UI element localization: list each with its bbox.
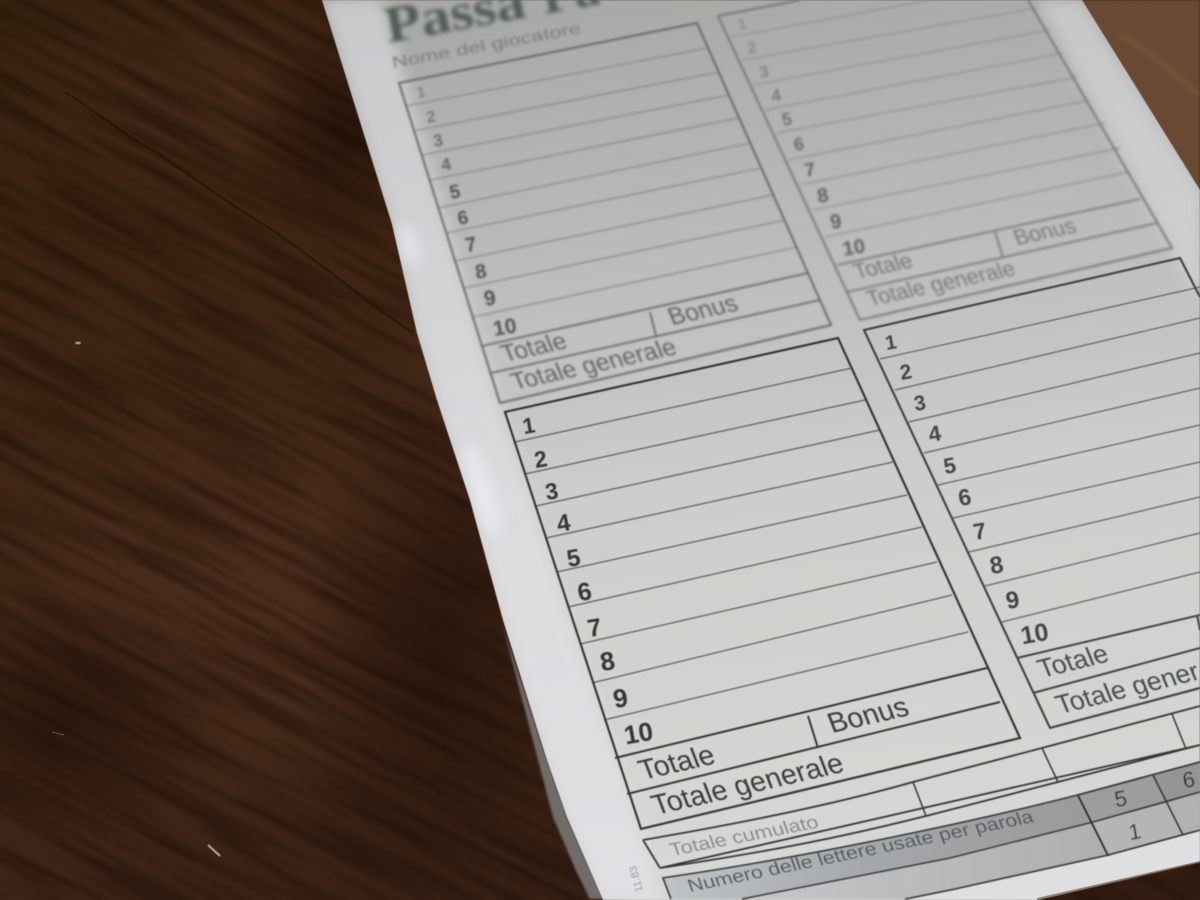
scorecard paper sheet <box>322 0 1200 900</box>
row numbers: 3 <box>912 391 928 416</box>
row numbers: 6 <box>956 483 973 511</box>
title <box>380 0 604 55</box>
gray letters-per-word bar <box>663 795 1108 899</box>
row numbers: 9 <box>611 682 630 714</box>
row numbers: 4 <box>770 85 783 106</box>
row numbers: 10 <box>491 314 518 341</box>
row numbers: 1 <box>520 412 537 439</box>
row numbers: 8 <box>816 184 830 208</box>
row numbers: 5 <box>780 108 794 130</box>
row numbers: 1 <box>884 331 898 355</box>
row numbers: 6 <box>575 577 594 607</box>
totals labels: Totale gener <box>1051 656 1200 720</box>
row numbers: 10 <box>1018 618 1051 650</box>
row numbers <box>737 15 867 261</box>
row numbers: 8 <box>474 260 488 284</box>
cell numbers: 5 <box>1112 785 1129 812</box>
cumulative total label: Totale cumulato <box>667 812 821 860</box>
row numbers: 3 <box>432 130 444 151</box>
row numbers: 5 <box>448 181 462 204</box>
row numbers <box>520 412 655 750</box>
print code: 11.83 <box>627 864 646 893</box>
totals labels: Totale <box>634 739 720 787</box>
row numbers: 2 <box>532 445 549 473</box>
letters-per-word label: Numero delle lettere usate per parola <box>685 807 1037 896</box>
row numbers: 3 <box>543 477 560 505</box>
totals labels: Totale <box>497 328 571 368</box>
row numbers: 7 <box>585 613 604 643</box>
row numbers: 4 <box>440 154 453 175</box>
panel: score table top left <box>399 23 831 403</box>
row numbers: 9 <box>1004 586 1022 615</box>
row numbers: 5 <box>565 544 583 573</box>
totals labels <box>497 290 742 396</box>
row numbers: 2 <box>746 39 758 58</box>
totals labels: Bonus <box>823 691 913 740</box>
totals labels: Totale generale <box>862 256 1019 311</box>
row numbers: 7 <box>464 233 478 257</box>
totals labels: Totale <box>1033 639 1113 684</box>
row numbers: 6 <box>792 133 806 155</box>
row numbers: 3 <box>758 63 770 82</box>
totals labels: Bonus <box>1009 213 1080 250</box>
row numbers: 4 <box>555 509 573 538</box>
row numbers: 8 <box>988 551 1006 580</box>
totals labels: Totale generale <box>507 334 681 396</box>
totals labels <box>1033 639 1200 720</box>
row numbers: 8 <box>598 645 617 677</box>
totals labels: Totale <box>849 248 916 284</box>
cell numbers <box>1112 766 1197 845</box>
row numbers: 9 <box>829 210 843 234</box>
row numbers: 2 <box>898 360 914 385</box>
totals labels: Bonus <box>664 290 742 331</box>
letter count cells <box>1078 762 1200 855</box>
cumulative total box <box>643 706 1200 868</box>
totals labels: Totale generale <box>647 748 848 822</box>
player name label: Nome del giocatore <box>391 20 583 72</box>
row numbers: 4 <box>926 420 944 447</box>
row numbers: 7 <box>803 159 817 182</box>
totals labels <box>634 691 913 822</box>
cell numbers: 1 <box>1126 818 1143 845</box>
panel: score table bottom right <box>864 258 1200 728</box>
row numbers: 6 <box>456 207 470 230</box>
row numbers: 7 <box>971 517 988 545</box>
pad side edge <box>503 626 603 899</box>
row numbers <box>884 331 1051 650</box>
row numbers: 9 <box>482 286 498 311</box>
row numbers: 1 <box>416 83 427 102</box>
row numbers: 5 <box>941 452 958 479</box>
wood corner top right <box>1078 0 1200 192</box>
row numbers: 10 <box>841 235 867 261</box>
row numbers: 2 <box>425 108 437 127</box>
row numbers: 10 <box>622 716 655 750</box>
row numbers: 1 <box>737 15 748 34</box>
cell numbers: 6 <box>1180 766 1197 793</box>
totals labels <box>849 213 1080 311</box>
panel: score table top right <box>718 0 1172 320</box>
panel: score table bottom left <box>505 338 1020 829</box>
row numbers <box>416 83 518 341</box>
